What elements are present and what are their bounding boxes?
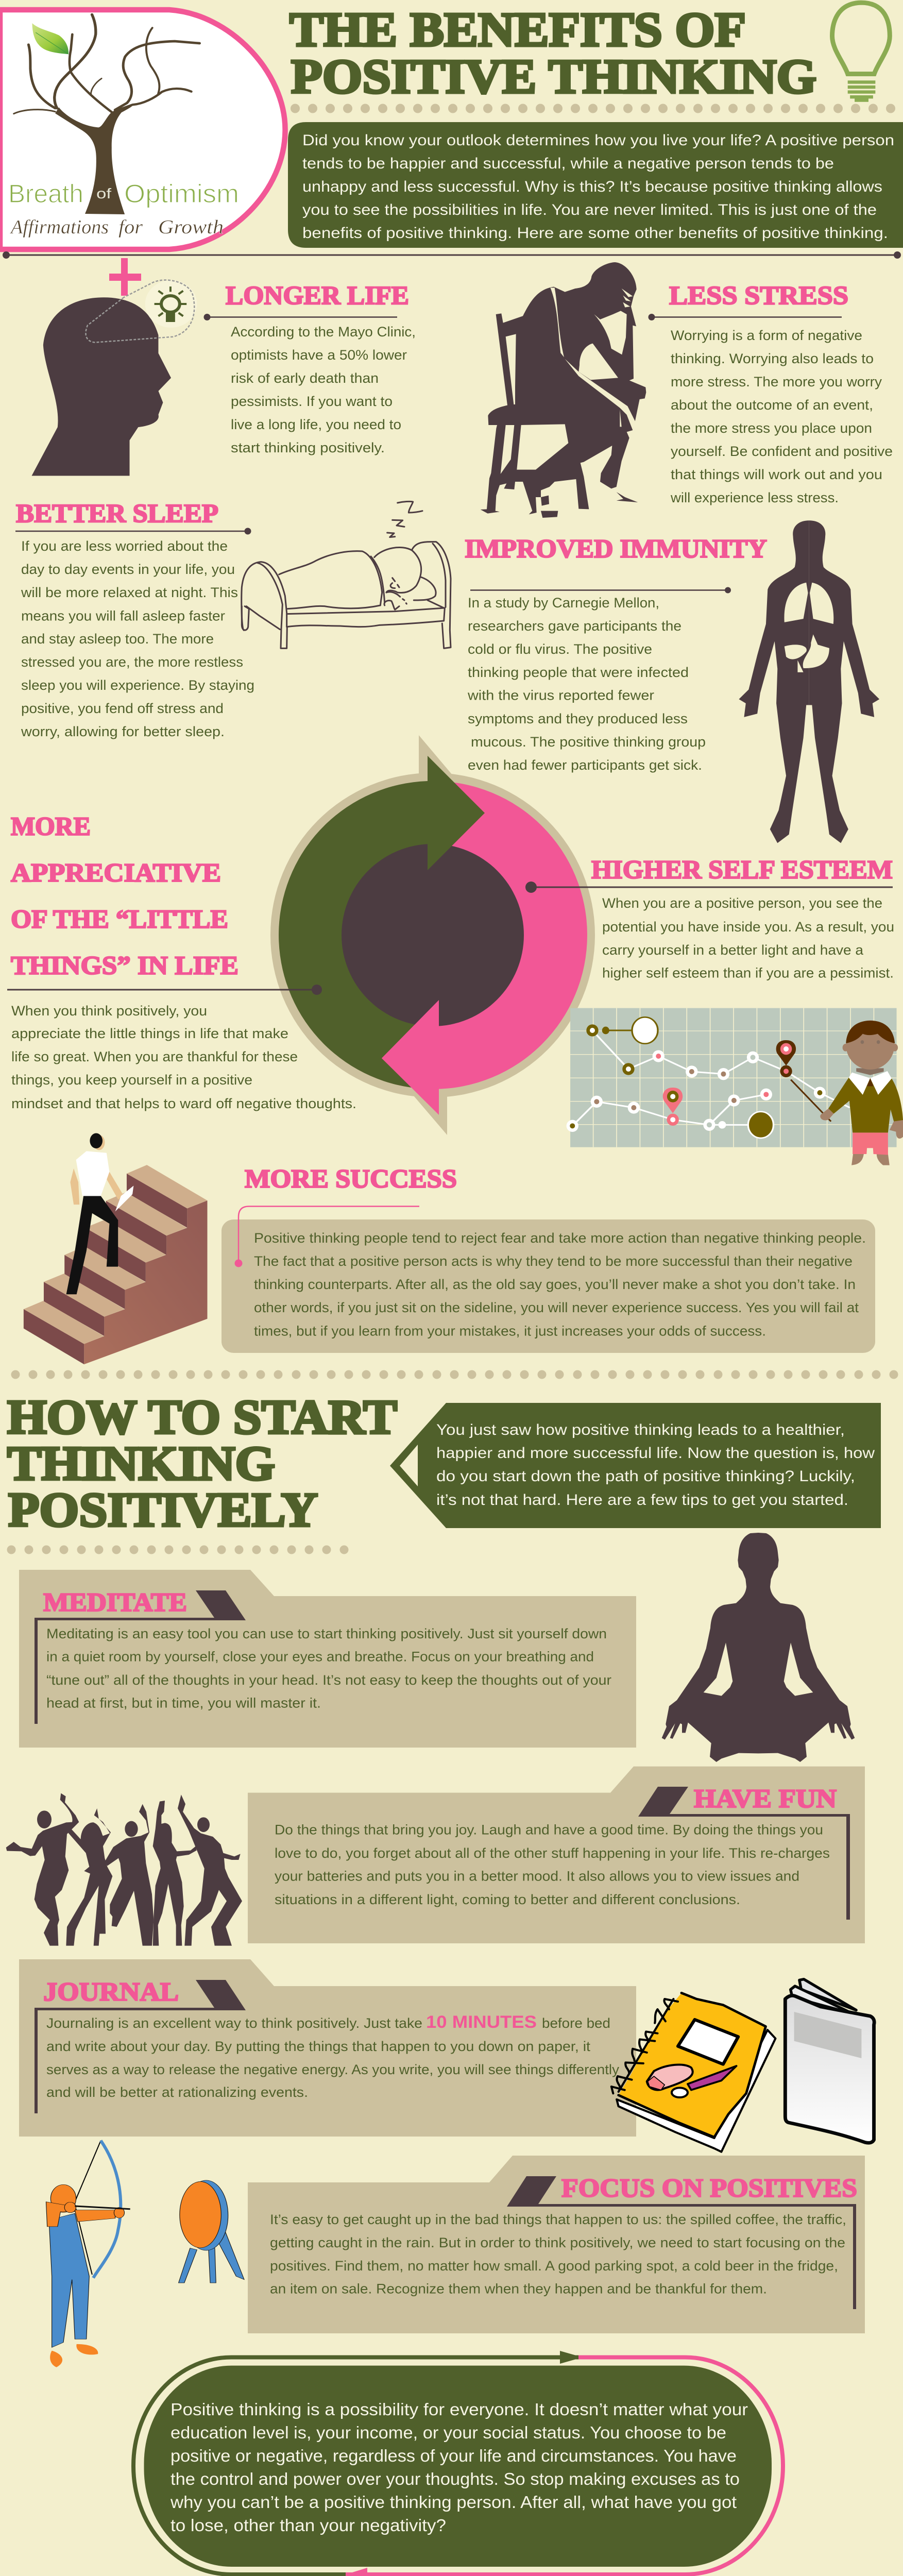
text: improved immunity: with the virus reported fewer <box>467 687 654 703</box>
icon: man climbing stairs <box>24 1133 207 1364</box>
logo panel <box>0 10 285 249</box>
text: less stress: yourself. Be confident and positive <box>671 444 893 459</box>
text: better sleep: and stay asleep too. The more <box>21 631 214 647</box>
text: conclusion: the control and power over your thoughts. So stop making excuses as to <box>171 2469 740 2488</box>
arrow: pink <box>382 1000 439 1115</box>
text: journal: and will be better at rationalizing events. <box>46 2084 308 2100</box>
heading: more success: MORE SUCCESS <box>245 1165 457 1194</box>
panel: intro: unhappy and less successful. Why is this? It’s because positive thinking allows <box>302 178 882 195</box>
title: POSITIVE THINKING <box>291 50 816 104</box>
logo wordmark: Optimism <box>124 179 239 208</box>
text: journal: and write about your day. By putting the things that happen to you down on paper, it <box>46 2039 591 2054</box>
heading: higher self esteem: HIGHER SELF ESTEEM <box>591 856 893 885</box>
arrow: olive loop <box>133 2351 583 2574</box>
panel: intro: Did you know your outlook determines how you live your life? A positive person <box>302 132 894 149</box>
panel: journal <box>19 1959 636 2137</box>
logo wordmark: of <box>96 185 111 201</box>
logo tagline <box>9 216 224 238</box>
heading: how to start: POSITIVELY <box>8 1483 318 1537</box>
callout: how to start intro: it’s not that hard. Here are a few tips to get you started. <box>436 1492 848 1509</box>
text: longer life: According to the Mayo Clinic, <box>231 324 416 340</box>
text: better sleep: positive, you fend off stress and <box>21 701 224 716</box>
text: focus on positives: getting caught in the rain. But in order to think positively, we need to start focusing on the <box>270 2235 845 2250</box>
icon: human body with organs <box>739 520 879 843</box>
text: better sleep: stressed you are, the more restless <box>21 654 243 670</box>
text: have fun: situations in a different light, coming to better and different conclusions. <box>275 1892 740 1907</box>
text: journal: Journaling is an excellent way to think positively. Just take <box>46 2015 422 2031</box>
arrow: green <box>428 756 485 870</box>
text: journal: 10 MINUTES <box>426 2012 537 2032</box>
text: journal: before bed <box>542 2015 610 2031</box>
text: improved immunity: In a study by Carnegie Mellon, <box>468 595 659 611</box>
text: better sleep: day to day events in your life, you <box>21 562 235 577</box>
text panel: more success: times, but if you learn from your mistakes, it just increases your odds of success. <box>254 1324 766 1339</box>
heading: better sleep: BETTER SLEEP <box>16 500 218 529</box>
panel: improved immunity <box>465 520 879 843</box>
text: meditate: “tune out” all of the thoughts in your head. It’s not easy to keep the thoughts out of your <box>46 1672 611 1688</box>
icon: person sleeping in bed <box>242 501 451 648</box>
text: better sleep <box>21 538 254 739</box>
icon: open book <box>785 1979 874 2143</box>
callout: how to start intro: You just saw how positive thinking leads to a healthier, <box>436 1421 845 1438</box>
icon: dancing people <box>6 1793 242 1946</box>
text panel: more success: thinking counterparts. After all, as the old say goes, you’ll never make a shot you don’t take. In <box>254 1277 856 1292</box>
heading: how to start <box>7 1391 397 1537</box>
text: have fun: your batteries and puts you in a better mood. It also allows you to view issues and <box>275 1869 799 1884</box>
text: better sleep: worry, allowing for better sleep. <box>21 724 225 739</box>
text: conclusion: Positive thinking is a possibility for everyone. It doesn’t matter what your <box>171 2400 748 2419</box>
text: improved immunity <box>467 595 706 773</box>
text: improved immunity: cold or flu virus. The positive <box>468 641 652 657</box>
text: more appreciative <box>11 1003 356 1111</box>
text: improved immunity: mucous. The positive thinking group <box>471 734 706 750</box>
callout: how to start intro: happier and more successful life. Now the question is, how <box>436 1445 875 1462</box>
callout: how to start intro <box>390 1403 881 1528</box>
text: conclusion: to lose, other than your negativity? <box>171 2516 446 2535</box>
text: longer life: optimists have a 50% lower <box>231 347 407 363</box>
heading: more appreciative: THINGS” IN LIFE <box>11 952 238 980</box>
heading: longer life: LONGER LIFE <box>226 282 409 311</box>
arrow: pink loop <box>346 2358 783 2576</box>
callout: how to start intro: do you start down the path of positive thinking? Luckily, <box>436 1468 855 1485</box>
text: more appreciative: mindset and that helps to ward off negative thoughts. <box>11 1096 356 1111</box>
text: meditate <box>46 1626 611 1710</box>
panel: intro: tends to be happier and successful, while a negative person tends to be <box>302 155 834 172</box>
text: more appreciative: appreciate the little things in life that make <box>11 1026 288 1041</box>
text: meditate: Meditating is an easy tool you can use to start thinking positively. Just sit yourself down <box>46 1626 607 1641</box>
text: higher self esteem: carry yourself in a better light and have a <box>602 942 864 958</box>
panel: higher self esteem <box>525 856 894 981</box>
text: improved immunity: thinking people that were infected <box>468 665 689 680</box>
text: less stress: more stress. The more you worry <box>671 374 882 389</box>
icon: woman on chair <box>481 262 646 518</box>
text: journal: serves as a way to release the negative energy. As you write, you will see things differently <box>46 2062 620 2077</box>
text: conclusion: positive or negative, regardless of your life and circumstances. You have <box>171 2446 737 2465</box>
text: higher self esteem <box>602 895 894 981</box>
icon: light bulb <box>832 3 890 102</box>
text: less stress: the more stress you place upon <box>671 420 872 436</box>
heading: focus on positives: FOCUS ON POSITIVES <box>561 2174 857 2203</box>
text: higher self esteem: When you are a positive person, you see the <box>602 895 882 911</box>
logo wordmark: Breath <box>8 179 83 208</box>
logo wordmark <box>8 179 239 208</box>
heading: journal: JOURNAL <box>43 1978 179 2007</box>
text: focus on positives: It’s easy to get caught up in the bad things that happen to us: the spilled coffee, the traffic, <box>270 2212 846 2227</box>
icon: head with idea <box>31 258 197 476</box>
text: improved immunity: even had fewer participants get sick. <box>468 757 702 773</box>
text: better sleep: sleep you will experience. By staying <box>21 677 254 693</box>
panel: meditate <box>19 1570 636 1748</box>
logo tagline: for <box>118 216 143 238</box>
heading: how to start: HOW TO START <box>7 1391 397 1444</box>
text: focus on positives <box>270 2212 846 2297</box>
panel: intro: you to see the possibilities in life. You are never limited. This is just one of the <box>302 201 877 218</box>
text: less stress <box>670 328 893 505</box>
panel: better sleep <box>15 500 451 739</box>
text: meditate: head at first, but in time, you will master it. <box>46 1695 321 1710</box>
text: less stress: will experience less stress. <box>670 490 839 505</box>
heading: how to start: THINKING <box>7 1437 275 1490</box>
title <box>289 3 816 104</box>
heading: more appreciative: APPRECIATIVE <box>11 859 221 888</box>
panel: have fun <box>248 1767 865 1943</box>
text: longer life: start thinking positively. <box>231 440 385 455</box>
heading: meditate: MEDITATE <box>43 1588 187 1617</box>
heading: more appreciative <box>11 812 238 980</box>
text: have fun: Do the things that bring you joy. Laugh and have a good time. By doing the things you <box>275 1822 823 1838</box>
panel: conclusion <box>133 2351 783 2576</box>
text: longer life <box>231 324 416 455</box>
text: focus on positives: an item on sale. Recognize them when they happen and be thankful for them. <box>270 2281 767 2297</box>
text panel: more success <box>222 1219 875 1353</box>
heading: less stress: LESS STRESS <box>669 282 848 311</box>
text: conclusion <box>170 2400 748 2535</box>
text: more appreciative: life so great. When you are thankful for these <box>11 1049 298 1064</box>
title: THE BENEFITS OF <box>289 3 746 57</box>
icon: meditating figure <box>662 1533 855 1762</box>
heading: have fun: HAVE FUN <box>694 1785 837 1814</box>
logo tagline: Growth <box>158 216 224 238</box>
text: have fun: love to do, you forget about all of the other stuff happening in your life. This re-charges <box>275 1845 830 1861</box>
text: improved immunity: symptoms and they produced less <box>468 711 688 726</box>
panel: focus on positives <box>248 2156 865 2333</box>
text: conclusion: why you can’t be a positive thinking person. After all, what have you got <box>170 2493 737 2512</box>
chart: circular arrows <box>270 735 595 1135</box>
logo tagline: Affirmations <box>9 216 109 238</box>
text: longer life: pessimists. If you want to <box>231 394 393 409</box>
text: longer life: live a long life, you need to <box>231 417 401 432</box>
text: conclusion: education level is, your income, or your social status. You choose to be <box>171 2423 726 2442</box>
text: higher self esteem: higher self esteem than if you are a pessimist. <box>602 965 894 981</box>
panel: more success <box>24 1133 875 1364</box>
text: have fun <box>275 1822 830 1907</box>
text: improved immunity: researchers gave participants the <box>468 618 681 634</box>
text: more appreciative: things, you keep yourself in a positive <box>11 1072 252 1088</box>
text: journal <box>46 2012 620 2100</box>
text: less stress: Worrying is a form of negative <box>671 328 862 343</box>
text: less stress: about the outcome of an event, <box>671 397 873 413</box>
text: longer life: risk of early death than <box>231 370 379 386</box>
panel: more appreciative <box>7 812 356 1111</box>
text: focus on positives: positives. Find them, no matter how small. A good parking spot, a cold beer in the fridge, <box>270 2258 838 2274</box>
panel: intro: benefits of positive thinking. Here are some other benefits of positive thinking. <box>302 225 888 242</box>
panel: longer life <box>31 258 416 476</box>
text: better sleep: If you are less worried about the <box>21 538 228 554</box>
icon: archer and target <box>46 2141 244 2367</box>
text: less stress: thinking. Worrying also leads to <box>671 351 874 366</box>
text: better sleep: will be more relaxed at night. This <box>21 585 238 600</box>
chart: presenter with line graph <box>567 1008 903 1165</box>
heading: more appreciative: OF THE “LITTLE <box>11 905 228 934</box>
heading: improved immunity: IMPROVED IMMUNITY <box>465 535 767 564</box>
text: less stress: that things will work out and you <box>671 467 882 482</box>
text panel: more success: The fact that a positive person acts is why they tend to be more successful than their negative <box>254 1253 853 1269</box>
panel: intro <box>288 122 903 248</box>
text: meditate: in a quiet room by yourself, close your eyes and breathe. Focus on your breathing and <box>46 1649 594 1664</box>
text: higher self esteem: potential you have inside you. As a result, you <box>602 919 894 935</box>
icon: notebook and pencil <box>611 1993 775 2152</box>
text panel: more success: Positive thinking people tend to reject fear and take more action than negative thinking people. <box>254 1230 866 1246</box>
heading: more appreciative: MORE <box>11 812 91 841</box>
icon: tree <box>14 14 199 214</box>
text: more appreciative: When you think positively, you <box>11 1003 207 1019</box>
text: better sleep: means you will fall asleep faster <box>21 608 225 623</box>
panel: less stress <box>481 262 893 518</box>
text panel: more success: other words, if you just sit on the sideline, you will never experience success. Yes you will fail at <box>254 1300 859 1315</box>
